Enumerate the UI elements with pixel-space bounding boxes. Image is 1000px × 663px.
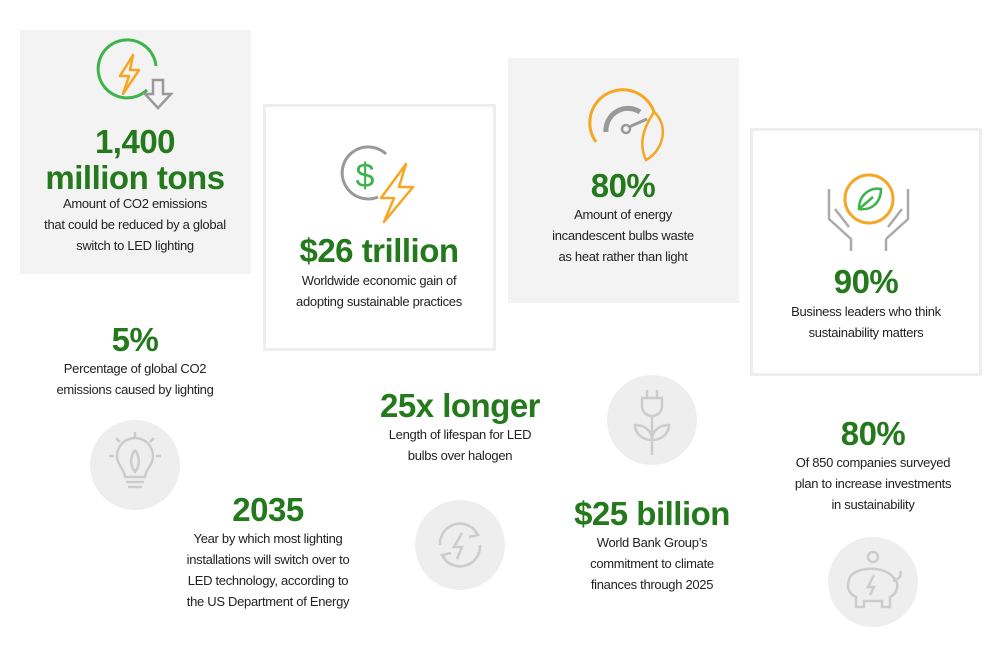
text: as heat rather than light [558,249,688,264]
stat: $25 billion: World Bank Group’s [597,535,707,550]
heading: $26 trillion [299,232,459,269]
heading: 90% [834,263,898,300]
text: Amount of energy [574,207,672,222]
text [552,207,694,264]
text [791,304,942,340]
stat: 2035: installations will switch over to [187,552,349,567]
stat: 2035: 2035 [232,491,304,528]
icon: hands leaf [828,174,910,251]
stat: 5% [56,321,214,397]
stat: 5%: 5% [112,321,158,358]
stat: 25x longer: bulbs over halogen [408,448,512,463]
stat: 80% companies: in sustainability [831,497,915,512]
stat: $25 billion: $25 billion [574,495,730,532]
icon: bolt with down arrow [96,38,174,110]
panel: economic gain [263,104,496,351]
icon: gauge leaf [588,88,664,162]
icon: recycle bolt circle [415,500,505,590]
stat: 25x longer: 25x longer [380,387,540,424]
stat: 80% companies [795,415,951,512]
panel: energy waste [508,58,739,303]
stat: 2035 [186,491,350,609]
text [296,273,462,309]
text: Business leaders who think [791,304,941,319]
icon: plug plant circle [607,375,697,465]
stat: 5%: emissions caused by lighting [56,382,214,397]
text: incandescent bulbs waste [552,228,694,243]
icon: bulb circle [90,420,180,510]
text: sustainability matters [809,325,923,340]
panel: co2 [20,30,251,274]
stat: 80% companies: 80% [841,415,905,452]
heading: million tons [45,159,225,196]
stat: $25 billion [574,495,730,592]
stat: 80% companies: Of 850 companies surveyed [796,455,950,470]
icon: piggy bank circle [828,537,918,627]
text: Worldwide economic gain of [302,273,456,288]
panel: business leaders [750,128,982,376]
icon: dollar bolt [340,145,414,224]
text: adopting sustainable practices [296,294,462,309]
text [44,196,226,253]
stat: $25 billion: commitment to climate [590,556,714,571]
text: Amount of CO2 emissions [63,196,207,211]
stat: 2035: the US Department of Energy [187,594,349,609]
stat: 80% companies: plan to increase investments [795,476,951,491]
stat: 25x longer: Length of lifespan for LED [389,427,531,442]
stat: 5%: Percentage of global CO2 [64,361,206,376]
stat: 25x longer [380,387,540,463]
stat: 2035: Year by which most lighting [194,531,342,546]
icon: dollar bolt: $ [356,157,375,195]
heading [45,123,225,196]
text: that could be reduced by a global [44,217,226,232]
stat: 2035: LED technology, according to [188,573,348,588]
stat: $25 billion: finances through 2025 [591,577,713,592]
heading: 80% [591,167,655,204]
heading: 1,400 [95,123,175,160]
text: switch to LED lighting [76,238,194,253]
